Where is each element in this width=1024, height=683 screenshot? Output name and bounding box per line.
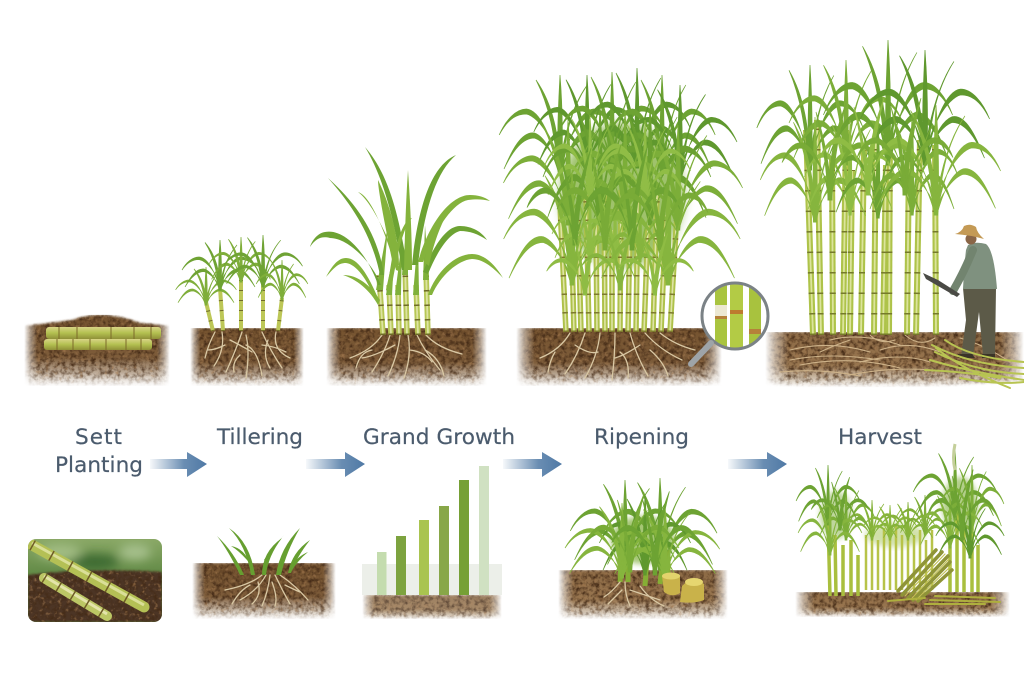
magnifier handle [691,343,711,364]
cut cane stack [888,550,1000,604]
lower tillering illustration [192,528,336,619]
right clump [913,444,1004,592]
stalks [806,120,936,335]
straw hat [955,225,984,239]
arm [953,250,973,291]
left clump [796,465,875,596]
arrow: sett planting to tillering [150,452,207,477]
soil [326,328,487,386]
soil with mound [24,315,170,386]
foliage mass [611,516,675,564]
shirt [963,243,997,289]
roots [540,333,695,380]
soil with mulch [765,332,1024,387]
stalks [560,180,678,332]
soil [190,328,304,386]
cut cane pieces [662,572,704,603]
machete [923,273,960,297]
leaf sheaths [376,210,429,295]
leaves [310,147,503,305]
growth bar chart [362,466,502,619]
stalks [379,265,428,335]
middle leaves [845,495,952,540]
label: Tillering: Tillering [216,425,303,450]
bars [377,466,489,595]
label: Ripening: Ripening [594,425,689,450]
leaves [565,478,720,578]
label: Sett Planting: Planting [55,453,143,478]
stems [620,540,668,586]
roots [604,582,664,606]
ground [795,592,1010,617]
soil [192,563,336,619]
harvester figure [923,225,997,358]
boots [958,354,995,358]
stage 3: grand growth illustration [310,147,503,386]
photo cane long [32,543,144,607]
sprouts [217,528,310,575]
middle mass [865,523,925,547]
head [966,234,976,244]
haze [362,564,502,595]
leaves [176,235,308,305]
lower harvest illustration [795,444,1010,617]
soil [558,570,728,619]
leaves [757,40,1001,222]
sett cane upper [46,327,161,339]
arrow: tillering to grand growth [306,452,365,477]
ground [362,595,502,619]
photo cane short [44,576,107,616]
stage 5: harvest illustration [757,40,1024,388]
arrow: ripening to harvest [728,452,787,477]
label: Grand Growth: Grand Growth [363,425,515,450]
photo soil [28,571,162,622]
soil [516,328,722,386]
straw [780,335,1010,376]
legs [961,288,996,357]
photo: sugarcane setts on soil [28,539,162,622]
stage 1: sett planting illustration [24,315,170,386]
roots [205,332,290,378]
sett cane lower [44,339,152,350]
label: Harvest: Harvest [838,425,922,450]
roots [225,575,308,606]
magnifier inset [691,280,768,364]
thin middle canes [866,525,932,590]
flower plume [954,444,955,470]
magnified stalks [715,284,761,348]
stalks [206,278,282,331]
roots [350,335,462,378]
lower ripening illustration [558,478,728,619]
label: Sett Planting: Sett [75,425,122,450]
stage 2: tillering illustration [176,235,308,386]
label: Sett Planting [55,425,143,478]
arrow: grand growth to ripening [503,452,562,477]
foliage mass [560,123,684,267]
cut cane pile [925,340,1024,388]
stage 4: ripening illustration [499,68,768,386]
leaves [499,68,743,295]
